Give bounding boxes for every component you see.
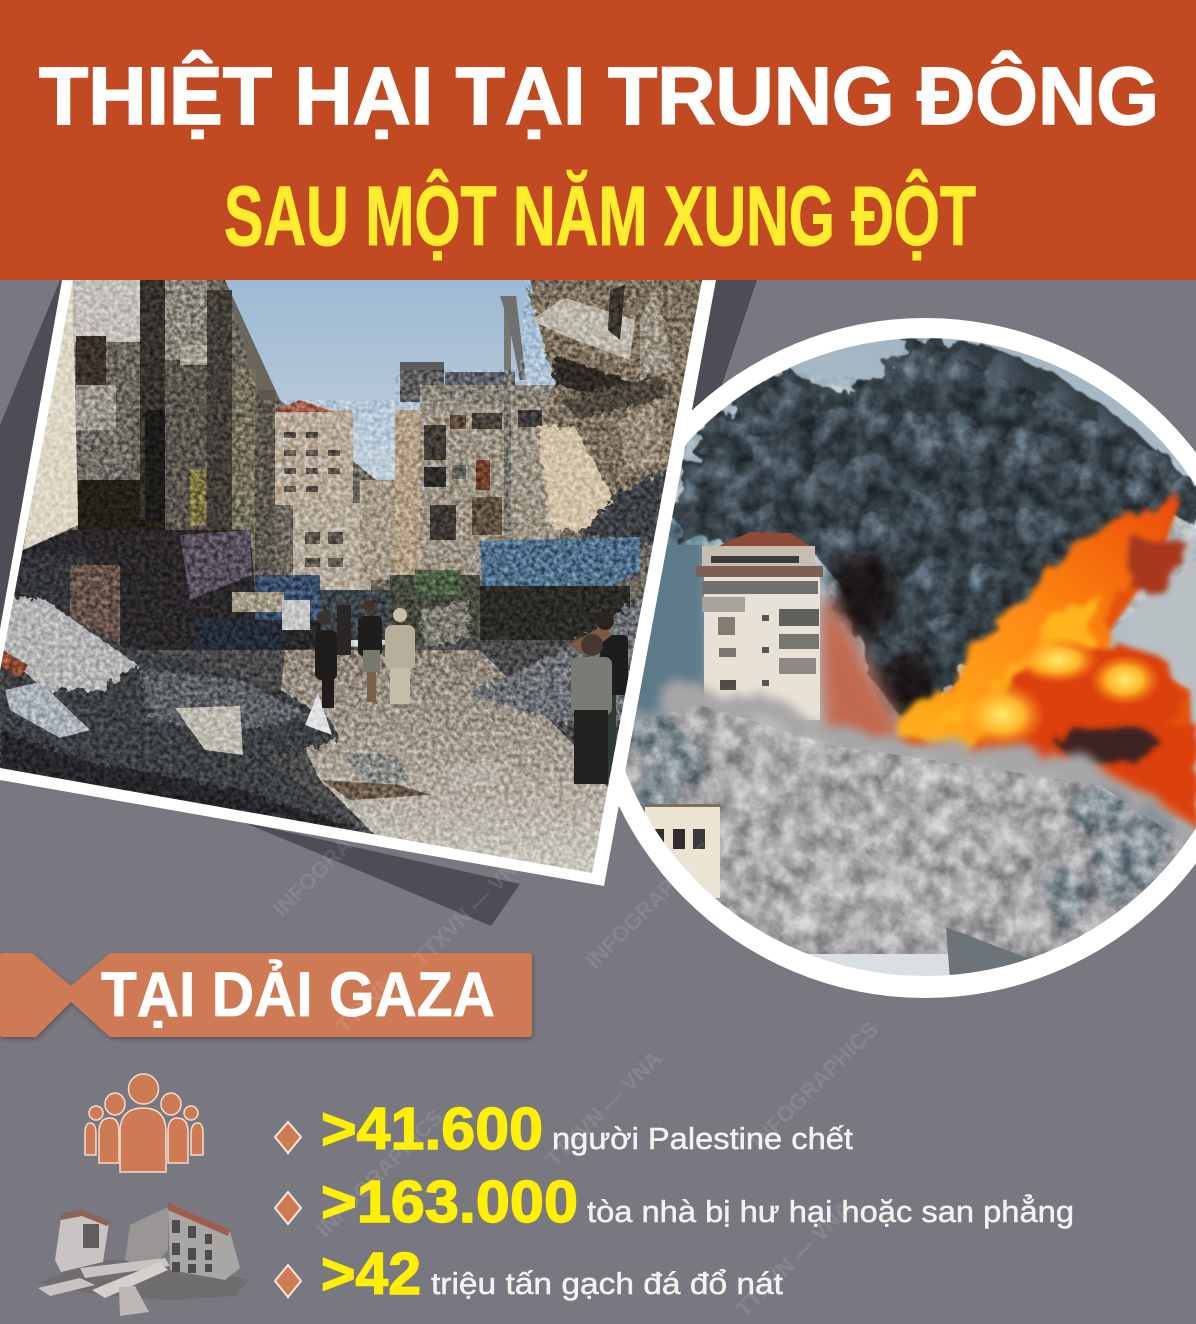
header band bbox=[0, 0, 1196, 280]
section banner: Gaza bbox=[0, 953, 532, 1037]
photo grain overlay bbox=[0, 280, 710, 880]
backing mass behind buildings bbox=[22, 280, 702, 616]
debris on road bbox=[322, 752, 505, 800]
pink smoke beside tower bbox=[821, 590, 905, 760]
fire body behind flames bbox=[890, 500, 1196, 830]
rooftop and frame at bottom bbox=[808, 927, 1027, 976]
photo: destroyed street in white tilted frame bbox=[0, 280, 716, 886]
black smoke cloud bbox=[668, 338, 1196, 724]
watermarks: INFOGRAPHICS bbox=[311, 1105, 448, 1242]
pale grey dust cloud bbox=[625, 675, 1196, 960]
watermarks bbox=[268, 785, 902, 1322]
watermarks: INFOGRAPHICS bbox=[268, 785, 405, 922]
stat: rubble: triệu tấn gạch đá đổ nát bbox=[431, 1266, 783, 1301]
right centre buildings bbox=[395, 296, 560, 580]
title line 1: THIỆT HẠI TẠI TRUNG ĐÔNG bbox=[39, 51, 1159, 142]
stat: buildings: >163.000 bbox=[321, 1169, 578, 1235]
photo: burning tower in round frame bbox=[585, 318, 1196, 1000]
pedestrians on street bbox=[315, 600, 415, 708]
dark shadows in smoke bbox=[833, 555, 934, 719]
statistics list bbox=[275, 1096, 1074, 1307]
small building lower left bbox=[645, 804, 720, 898]
street photo content bbox=[0, 280, 710, 880]
stat: deaths: >41.600 bbox=[321, 1096, 543, 1162]
fire streak bbox=[896, 496, 1190, 752]
dark angular shapes behind photos bbox=[0, 280, 757, 926]
watermarks: INFOGRAPHICS bbox=[746, 1017, 883, 1154]
rubble pile right bbox=[420, 597, 643, 723]
stat: buildings bbox=[275, 1169, 1074, 1235]
fireball bbox=[958, 636, 1196, 831]
watermarks: INFOGRAPHICS bbox=[581, 837, 718, 974]
ribbon shape bbox=[0, 953, 532, 1037]
street surface bbox=[280, 650, 610, 880]
dust texture overlay bbox=[626, 706, 1182, 960]
stat: rubble bbox=[275, 1241, 783, 1307]
left buildings bbox=[23, 280, 275, 570]
two men at right foreground bbox=[568, 612, 628, 784]
white photo border bbox=[0, 280, 716, 886]
round white frame bbox=[585, 318, 1196, 998]
stat: deaths bbox=[275, 1096, 853, 1162]
icon: group of people bbox=[85, 1074, 203, 1172]
stat: rubble: >42 bbox=[321, 1241, 421, 1307]
stat: deaths: người Palestine chết bbox=[552, 1121, 853, 1156]
watermarks: TTXVN — VNA bbox=[541, 1046, 667, 1172]
watermarks: TTXVN bbox=[331, 970, 400, 1039]
parked cars and carts bbox=[232, 592, 284, 612]
icon: collapsed building bbox=[38, 1203, 249, 1316]
round photo content bbox=[625, 338, 1196, 976]
watermarks: TTXVN — VNA bbox=[408, 846, 534, 972]
rubble pile left bbox=[0, 596, 360, 850]
banner heading: TẠI DẢI GAZA bbox=[101, 959, 495, 1030]
watermarks: TTXVN — VNA bbox=[776, 823, 902, 949]
blue tarpaulin bbox=[480, 537, 640, 586]
ground base bbox=[0, 640, 620, 834]
shop awnings and street-level shade bbox=[14, 530, 640, 650]
watermarks: TTXVN — VNA bbox=[731, 1196, 857, 1322]
right ruined building bbox=[528, 280, 702, 545]
far centre buildings bbox=[271, 400, 395, 593]
tall white tower bbox=[696, 532, 823, 720]
smoke texture overlay bbox=[660, 335, 1196, 735]
stat: buildings: tòa nhà bị hư hại hoặc san phẳng bbox=[587, 1193, 1074, 1229]
